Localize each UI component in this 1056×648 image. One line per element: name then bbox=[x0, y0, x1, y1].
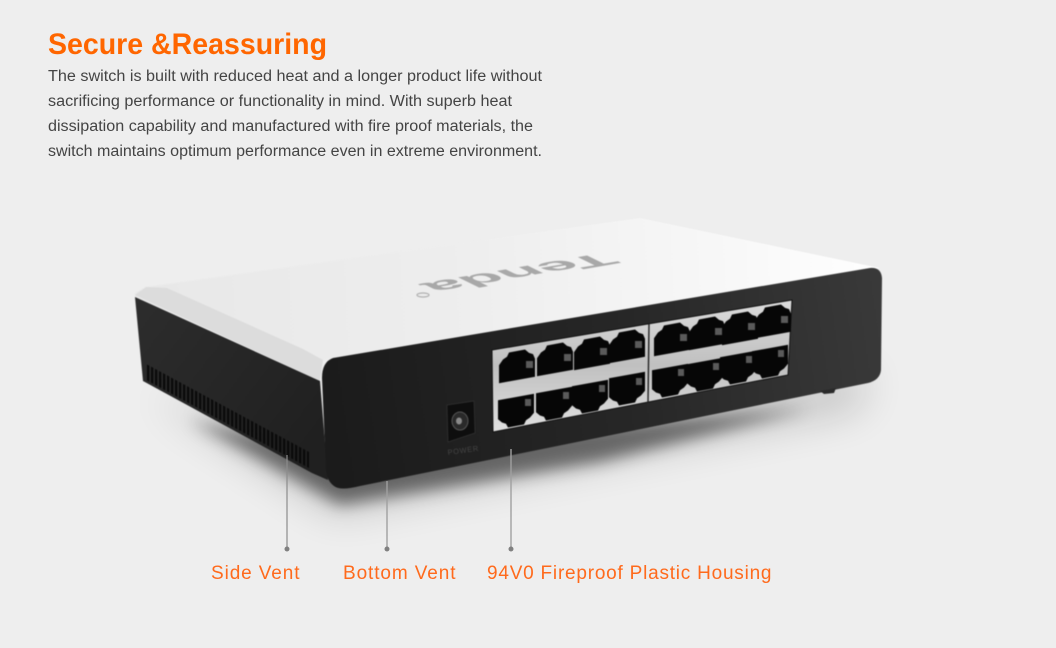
callout: fireproof housing bbox=[487, 449, 772, 584]
front panel bbox=[322, 268, 882, 488]
power label: POWER bbox=[447, 444, 479, 457]
rubber feet bbox=[820, 388, 836, 394]
description text: switch maintains optimum performance even in extreme environment. bbox=[48, 143, 542, 160]
power jack bbox=[447, 401, 475, 442]
registered mark bbox=[417, 293, 429, 297]
callout: fireproof housing: 94V0 Fireproof Plastic Housing bbox=[487, 563, 772, 584]
callout: bottom vent: Bottom Vent bbox=[343, 563, 456, 584]
network switch bbox=[135, 218, 882, 488]
description text bbox=[48, 68, 543, 160]
product shadow bbox=[150, 370, 870, 515]
description text: sacrificing performance or functionality in mind. With superb heat bbox=[48, 93, 513, 110]
callout: side vent bbox=[211, 455, 300, 584]
port contacts bbox=[525, 316, 788, 406]
callout: side vent: Side Vent bbox=[211, 563, 300, 584]
callout: bottom vent bbox=[343, 481, 456, 584]
logo: Tenda bbox=[411, 250, 628, 297]
ethernet port panel bbox=[492, 300, 792, 432]
side panel bbox=[135, 297, 328, 480]
side vent slots bbox=[147, 372, 309, 460]
title: Secure &Reassuring bbox=[48, 28, 327, 61]
bottom row ports bbox=[498, 345, 788, 429]
top cover bbox=[135, 218, 880, 381]
top row ports bbox=[499, 303, 791, 383]
top cover bevel bbox=[135, 287, 323, 381]
description text: The switch is built with reduced heat and a longer product life without bbox=[48, 68, 543, 85]
description text: dissipation capability and manufactured with fire proof materials, the bbox=[48, 118, 533, 135]
